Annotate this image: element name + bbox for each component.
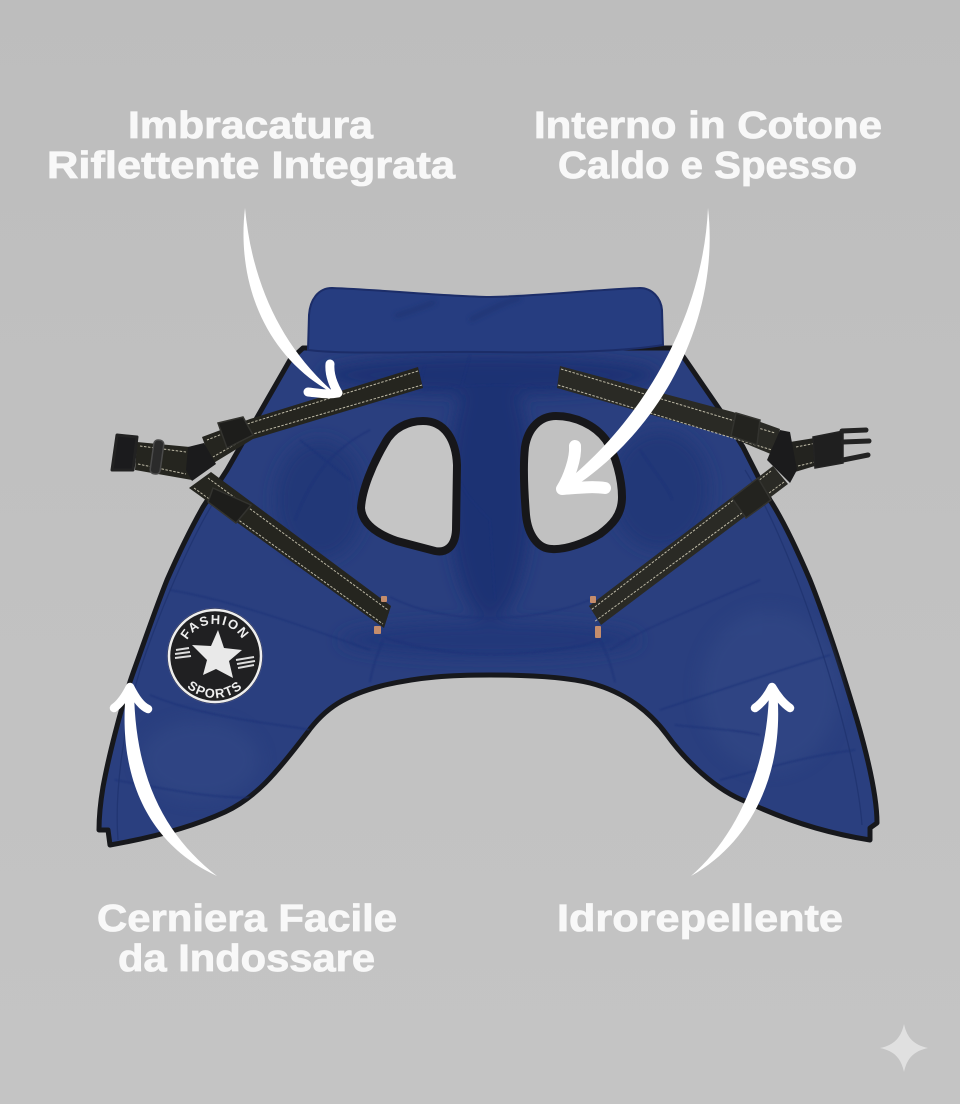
arrow: water repellent [691,687,790,876]
left side-release buckle [112,435,137,470]
left triangle hardware [186,443,216,481]
badge text bottom: SPORTS [188,682,241,698]
left harness [112,367,423,628]
right armhole [524,416,622,549]
coat body [99,348,877,845]
right lower strap [589,466,788,625]
arrow: zipper [114,687,217,876]
left slider ring [150,439,164,475]
right strap keepers [731,413,760,445]
badge stripes [175,648,255,668]
right triangle hardware [767,430,797,483]
collar [308,288,663,353]
badge: fashion sports [166,608,264,704]
right upper strap [557,366,780,455]
heading: water repellent: Idrorepellente [557,898,843,940]
heading: warm thick cotton lining: Interno in Cotone [534,105,882,147]
left armhole [361,421,457,551]
heading: easy-wear zipper: da Indossare [118,938,375,980]
heading: warm thick cotton lining: Caldo e Spesso [558,145,857,187]
icon: sparkle [880,1024,928,1072]
right buckle strap [790,435,838,472]
heading: easy-wear zipper: Cerniera Facile [97,898,397,940]
badge star [192,630,242,678]
copper tabs [374,596,601,638]
dog coat product photo [96,287,880,848]
coat shading and quilting [115,355,862,840]
heading: integrated reflective harness: Riflettente Integrata [47,145,456,187]
heading: integrated reflective harness [47,105,456,187]
heading: integrated reflective harness: Imbracatura [128,105,374,147]
left upper strap [202,367,423,464]
heading: easy-wear zipper [97,898,397,980]
right side-release buckle [813,430,869,468]
heading: warm thick cotton lining [534,105,882,187]
badge text top: FASHION [180,615,249,640]
arrow: harness [243,208,338,396]
left strap keepers [218,417,253,448]
arrow: cotton lining [558,208,710,494]
left lower strap [189,472,391,628]
left stitching [138,371,422,624]
collar folds [395,298,520,320]
right harness [557,366,869,625]
left buckle strap [135,442,192,480]
right stitching [558,369,836,622]
